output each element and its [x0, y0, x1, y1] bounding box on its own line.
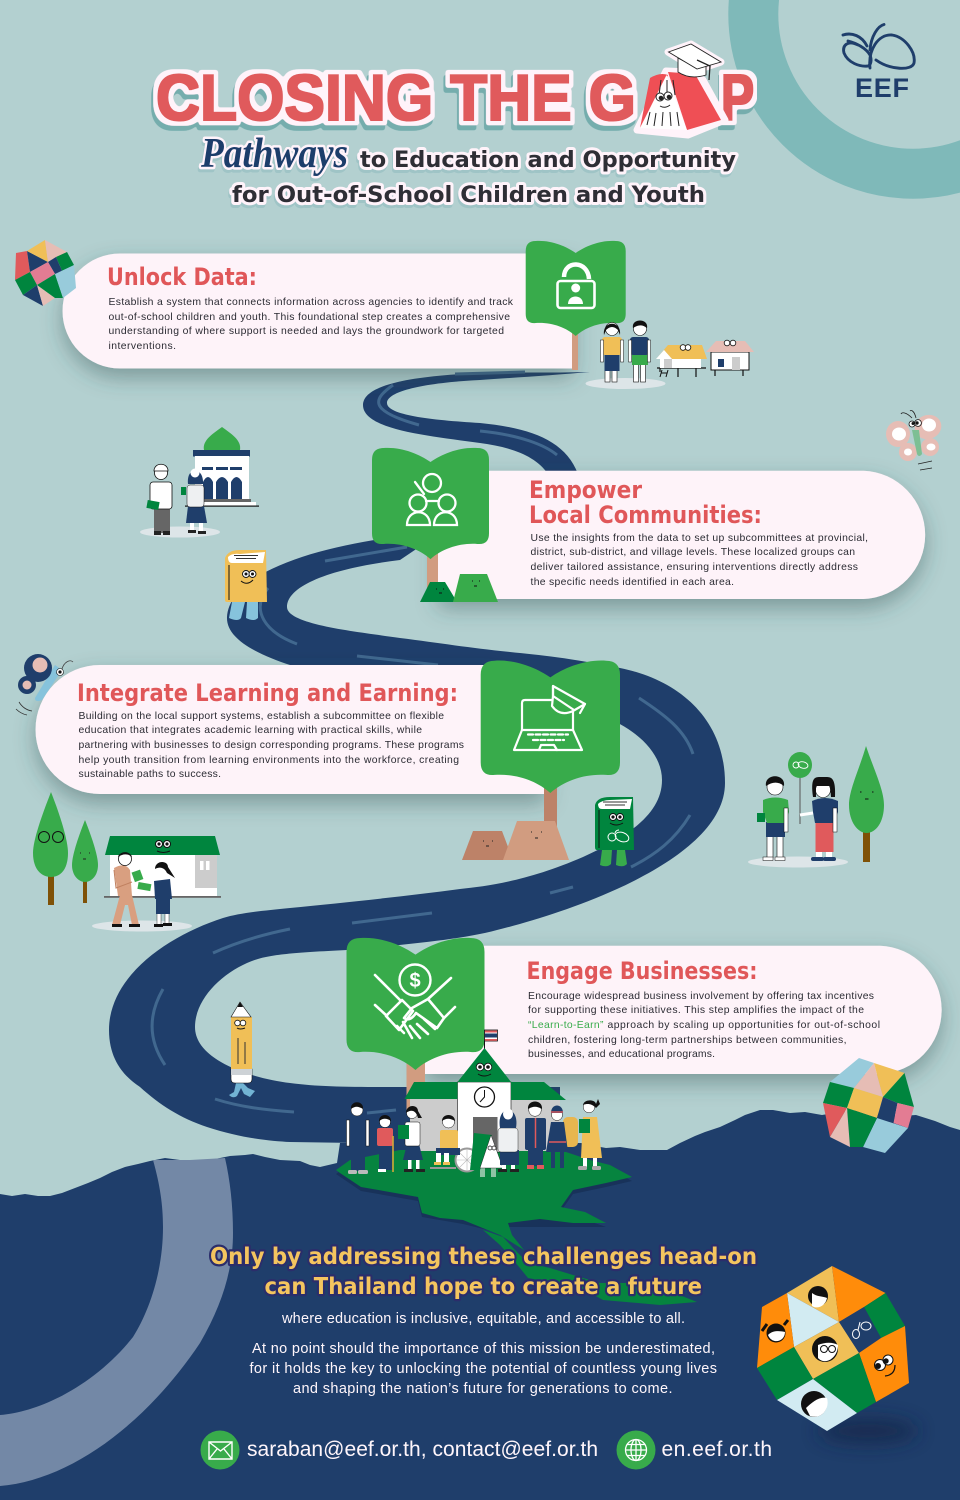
person: young man in jacket: [525, 1102, 546, 1169]
person: hill-tribe girl with basket: [546, 1106, 578, 1168]
title: CLOSING THE G: [156, 61, 636, 134]
icon: yellow book character: [225, 550, 267, 620]
panel: integrate learning and earning: [36, 661, 620, 860]
person: girl with hijab: [498, 1108, 519, 1172]
text: empower body: Use the insights from the data to set up subcommittees at provincial,: [530, 533, 868, 544]
heading: unlock data: Unlock Data:: [107, 263, 257, 291]
sign post: [544, 785, 557, 830]
icon: globe: [616, 1430, 656, 1470]
icon: open-book sign with handshake: $: [409, 970, 421, 992]
text: integrate body: Building on the local support systems, establish a subcommittee on flexible: [78, 711, 444, 722]
text: unlock data body: interventions.: [108, 341, 176, 352]
text: empower body: deliver tailored assistance, ensuring interventions directly address: [530, 562, 858, 573]
text: integrate body: partnering with businesses to design corresponding programs. These programs: [78, 740, 464, 751]
subtitle: for Out-of-School Children and Youth: [232, 183, 705, 208]
text: engage body: for supporting these initiatives. This step amplifies the impact of the: [528, 1005, 864, 1016]
icon: navy butterfly: [16, 654, 73, 715]
text: website: en.eef.or.th: [662, 1438, 772, 1461]
sign post: [572, 328, 578, 370]
text: integrate body: education that integrates academic learning with practical skills, while: [78, 725, 422, 736]
sign post: [406, 1060, 425, 1110]
ground: curved light band: [0, 1158, 233, 1486]
illustration: school with flag: [404, 1030, 566, 1152]
icon: pencil character: [229, 1002, 255, 1097]
illustration: two children: [586, 320, 666, 389]
illustration: children with balloon: [748, 752, 848, 868]
illustration: stilt houses: [656, 340, 754, 377]
text: empower body: district, sub-district, and village levels. These localized groups can: [530, 547, 855, 558]
text: statement body: At no point should the importance of this mission be underestimated,: [252, 1341, 715, 1357]
illustration: office building: [104, 836, 221, 898]
icon: white book mascot: [470, 1133, 503, 1177]
text: integrate body: sustainable paths to success.: [78, 769, 221, 780]
text: unlock data body: out-of-school children and youth. This foundational step creates a comprehensive: [108, 312, 510, 323]
heading: yellow statement: Only by addressing these challenges head-on: [210, 1244, 757, 1270]
icon: pink butterfly: [886, 411, 945, 470]
decorative teal ring: [753, 0, 960, 174]
face: right eyes: [874, 1355, 895, 1376]
logo: EEF: EEF: [855, 73, 909, 103]
text: empower body: [530, 533, 868, 588]
icon: open-book sign with community: [372, 448, 489, 559]
icon: EEF mark: [852, 1322, 871, 1338]
illustration: mosque: [185, 427, 259, 507]
icon: mosaic hexagon: [823, 1058, 914, 1153]
icon: open-book sign with handshake: [346, 938, 484, 1070]
illustration: row of diverse people: [346, 1099, 602, 1177]
text: statement body: for it holds the key to unlocking the potential of countless young lives: [250, 1361, 717, 1377]
map: Thailand: [336, 1150, 697, 1305]
sign post: [427, 552, 438, 592]
heading: integrate learning and earning: Integrate Learning and Earning:: [77, 679, 458, 707]
title: [156, 44, 754, 135]
person: child with crutch: [377, 1115, 393, 1172]
person: woman in yellow dress: [578, 1099, 602, 1170]
icon: open book letter A with graduation cap: [637, 44, 725, 135]
icon: green hill characters: [420, 574, 498, 602]
face: left child: [762, 1320, 788, 1342]
panel: engage businesses: [346, 938, 942, 1110]
face: centre with glasses: [812, 1336, 838, 1362]
icon: open-book sign with laptop: [481, 661, 620, 793]
heading: yellow statement: can Thailand hope to create a future: [264, 1274, 702, 1300]
person: student with green book: [398, 1106, 425, 1172]
icon: email: [200, 1430, 240, 1470]
heading: empower local communities: Empower: [529, 476, 642, 504]
road: winding path: [109, 372, 725, 1146]
text: email addresses: saraban@eef.or.th, contact@eef.or.th: [247, 1438, 598, 1461]
text: empower body: the specific needs identified in each area.: [530, 577, 734, 588]
panel: empower local communities: [372, 448, 925, 602]
subtitle: to Education and Opportunity: [360, 148, 736, 173]
text: statement body: and shaping the nation’s future for generations to come.: [293, 1381, 672, 1397]
person: student in uniform: [346, 1102, 369, 1174]
logo: EEF: [843, 24, 914, 103]
face: top girl: [808, 1286, 828, 1307]
person: student in wheelchair: [430, 1115, 478, 1172]
illustration: trees with faces: [33, 792, 98, 905]
text: integrate body: help youth transition from learning environments into the workforce, creating: [78, 755, 459, 766]
icon: mosaic octagon with faces: [757, 1266, 918, 1444]
heading: engage businesses: Engage Businesses:: [526, 957, 758, 985]
illustration: tree with face: [849, 746, 884, 862]
text: integrate body: [78, 711, 464, 780]
illustration: man and woman at mosque: [140, 464, 220, 538]
face: bottom boy: [801, 1391, 828, 1417]
text: engage body: children, fostering long-term partnerships between communities,: [528, 1035, 846, 1046]
heading: empower local communities: Local Communities:: [529, 501, 762, 529]
icon: small mosaic octagon: [15, 240, 76, 306]
icon: brown hill characters: [462, 821, 569, 860]
text: engage body: [528, 991, 880, 1060]
text: unlock data body: Establish a system that connects information across agencies to identify and track: [108, 297, 514, 308]
callout: closing statement: [210, 1244, 757, 1397]
illustration: officer and student exchanging book: [92, 852, 192, 932]
subtitle: [200, 131, 736, 208]
text: engage body: approach by scaling up opportunities for out-of-school: [608, 1020, 880, 1031]
text: unlock data body: understanding of where support is needed and lays the groundwork for targeted: [108, 326, 504, 337]
heading: empower local communities: [529, 476, 762, 529]
panel: unlock data: [62, 241, 626, 370]
heading: yellow statement: [210, 1244, 757, 1300]
text: engage body: businesses, and educational programs.: [528, 1049, 715, 1060]
title letter P: P: [721, 61, 754, 134]
icon: green book character: [595, 797, 634, 866]
text: statement body: [250, 1311, 717, 1397]
text: engage body: Encourage widespread business involvement by offering tax incentives: [528, 991, 874, 1002]
ground: navy torn-paper base: [0, 1110, 960, 1500]
text: statement body: where education is inclusive, equitable, and accessible to all.: [281, 1311, 685, 1327]
subtitle: Pathways: Pathways: [200, 131, 348, 177]
icon: open-book sign with lock: [526, 241, 626, 336]
text: engage body: “Learn-to-Earn”: [528, 1020, 604, 1031]
text: unlock data body: [108, 297, 514, 352]
